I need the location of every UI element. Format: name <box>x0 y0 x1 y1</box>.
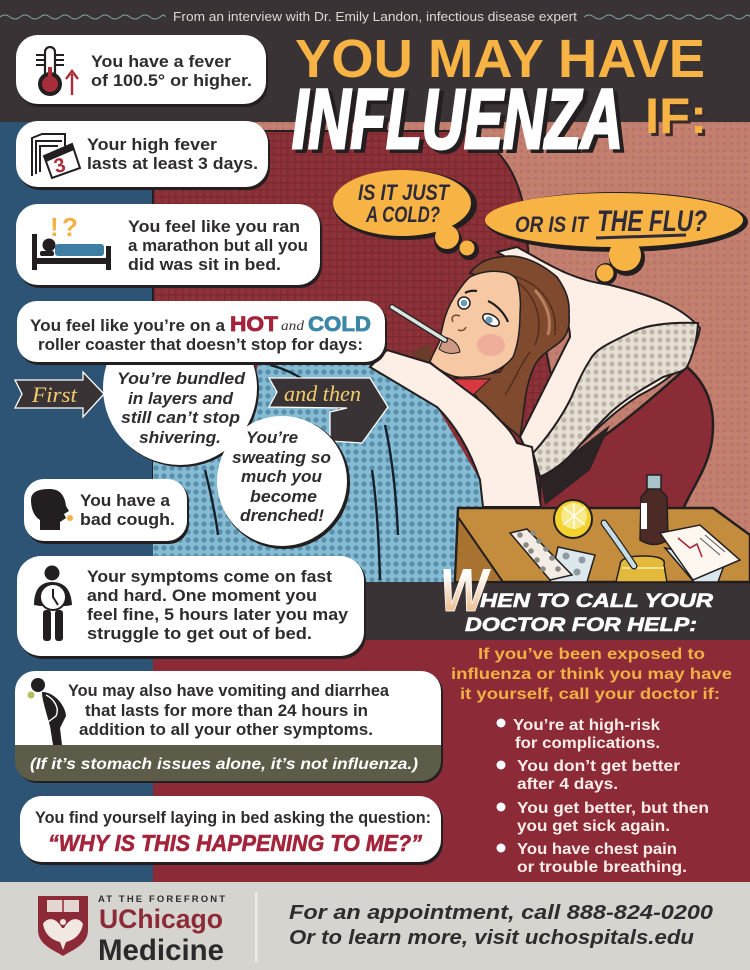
panel: ran a marathon: did was sit in bed. <box>128 256 281 274</box>
title <box>292 29 710 169</box>
list: reasons to call: for complications. <box>515 735 660 752</box>
wavy line right <box>584 15 750 19</box>
panel: vomiting and diarrhea: You may also have vomiting and diarrhea <box>68 682 390 700</box>
footer: AT THE FOREFRONT <box>98 894 225 905</box>
icon: coughing head <box>31 489 73 530</box>
list: reasons to call: You don’t get better <box>517 758 680 775</box>
title: IF: <box>648 91 710 147</box>
icon: honey jar and spoon <box>604 523 667 582</box>
thought bubble: or is it the flu: OR IS IT <box>515 212 589 237</box>
panel: fever lasts 3 days <box>16 121 270 190</box>
thought bubble: is it just a cold <box>333 170 479 260</box>
arrow: first <box>15 372 104 417</box>
icon: person vomiting <box>28 678 66 745</box>
icon: bed with exclamation and question: ? <box>62 212 78 242</box>
panel: ran a marathon <box>16 204 322 288</box>
armchair right wing <box>540 367 713 512</box>
callout: sweating: sweating so <box>232 448 331 467</box>
panel: vomiting and diarrhea: (If it’s stomach issues alone, it’s not influenza.) <box>30 756 418 773</box>
list: reasons to call <box>496 717 709 876</box>
panel: vomiting and diarrhea: addition to all your other symptoms. <box>79 721 373 739</box>
heading: when to call your doctor: DOCTOR FOR HELP: <box>465 615 697 636</box>
thought bubble: or is it the flu <box>485 192 748 285</box>
callout: bundled in layers <box>103 311 259 467</box>
callout: sweating: drenched! <box>240 506 324 525</box>
footer <box>0 882 750 970</box>
icon: book <box>660 525 740 582</box>
panel: symptoms come on fast: Your symptoms come on fast <box>87 568 333 586</box>
panel: bad cough <box>24 479 189 544</box>
panel: ran a marathon: a marathon but all you <box>128 237 308 255</box>
text block: call your doctor if: If you’ve been exposed to <box>478 646 705 663</box>
icon: pill blister packs <box>510 529 595 582</box>
thought bubble: is it just a cold: IS IT JUST <box>358 180 450 205</box>
panel: bad cough: bad cough. <box>80 511 175 529</box>
panel: symptoms come on fast <box>17 556 366 659</box>
red shirt <box>452 379 490 398</box>
title: YOU MAY HAVE <box>295 29 705 89</box>
panel: symptoms come on fast: and hard. One moment you <box>87 587 317 605</box>
armchair back <box>153 131 560 520</box>
illustration: bedside table with medicines <box>455 475 750 582</box>
text block: call your doctor if <box>451 646 732 703</box>
title: IF: <box>645 88 707 144</box>
panel: vomiting and diarrhea <box>15 671 443 783</box>
callout: bundled in layers: in layers and <box>128 389 234 408</box>
panel: hot and cold roller coaster: COLD <box>308 313 371 336</box>
panel: hot and cold roller coaster <box>17 301 387 365</box>
arrow: and then <box>269 378 388 443</box>
icon: syrup bottle <box>640 475 668 544</box>
panel: fever lasts 3 days: lasts at least 3 days. <box>87 155 258 173</box>
list: reasons to call: You get better, but then <box>517 800 709 817</box>
callout: sweating <box>217 416 350 549</box>
top credit line: From an interview with Dr. Emily Landon, infectious disease expert <box>173 10 578 24</box>
panel: fever 100.5 <box>16 35 268 107</box>
thought bubble: or is it the flu: THE FLU? <box>597 205 707 238</box>
white gown sleeve <box>370 350 541 507</box>
arrow: first: First <box>31 382 78 407</box>
footer: Medicine <box>98 934 224 967</box>
panel: bad cough: You have a <box>80 492 171 510</box>
list: reasons to call: you get sick again. <box>517 818 670 835</box>
icon: university crest <box>38 896 88 956</box>
panel: why is this happening to me <box>20 796 443 865</box>
panel: fever 100.5: You have a fever <box>91 53 232 71</box>
panel: hot and cold roller coaster: roller coaster that doesn’t stop for days: <box>38 336 363 354</box>
panel: why is this happening to me: You find yourself laying in bed asking the question: <box>35 809 431 827</box>
panel: why is this happening to me: “WHY IS THIS HAPPENING TO ME?” <box>48 830 422 856</box>
thought bubble: is it just a cold: A COLD? <box>365 202 440 227</box>
icon: bed with exclamation and question <box>32 212 111 270</box>
footer: Or to learn more, visit uchospitals.edu <box>289 926 695 949</box>
panel: hot and cold roller coaster: and <box>281 319 305 334</box>
arrow: and then: and then <box>284 381 361 406</box>
callout: bundled in layers: still can’t stop <box>121 408 240 427</box>
list: reasons to call: You have chest pain <box>517 841 677 858</box>
hair <box>410 256 569 437</box>
icon: bed with exclamation and question: ! <box>50 212 59 242</box>
panel: vomiting and diarrhea: that lasts for more than 24 hours in <box>85 702 368 720</box>
icon: calendar <box>32 134 80 178</box>
heading: when to call your doctor: HEN TO CALL YOUR <box>480 591 713 612</box>
shadow under pillow <box>540 425 610 505</box>
panel: hot and cold roller coaster: HOT <box>230 313 278 336</box>
callout: bundled in layers: shivering. <box>139 428 221 447</box>
list: reasons to call: or trouble breathing. <box>517 859 687 876</box>
callout: sweating: much you <box>241 467 323 486</box>
callout: sweating: become <box>250 487 317 506</box>
icon: calendar: 3 <box>52 154 68 178</box>
list: reasons to call: You’re at high-risk <box>513 717 660 734</box>
callout: sweating: You’re <box>246 428 298 447</box>
blue blanket <box>153 365 484 582</box>
panel: hot and cold roller coaster: You feel like you’re on a <box>30 317 226 335</box>
icon: person with clock <box>34 566 72 641</box>
panel: fever 100.5: of 100.5° or higher. <box>91 72 252 90</box>
face <box>430 271 520 377</box>
panel: ran a marathon: You feel like you ran <box>128 218 300 236</box>
heading: when to call your doctor: W <box>440 557 491 624</box>
thermometer in mouth <box>392 307 445 340</box>
panel: symptoms come on fast: feel fine, 5 hours later you may <box>87 606 349 624</box>
icon: thermometer with up arrow <box>36 47 78 96</box>
icon: lemon <box>554 500 592 538</box>
top credit line <box>0 10 750 24</box>
footer: For an appointment, call 888-824-0200 <box>289 901 714 924</box>
illustration: woman sick in armchair <box>153 131 713 582</box>
panel: fever lasts 3 days: Your high fever <box>87 136 218 154</box>
text block: call your doctor if: influenza or think you may have <box>451 666 732 683</box>
footer: UChicago <box>99 904 223 934</box>
callout: bundled in layers: You’re bundled <box>117 369 246 388</box>
list: reasons to call: after 4 days. <box>517 776 618 793</box>
panel: symptoms come on fast: struggle to get out of bed. <box>87 625 312 643</box>
heading: when to call your doctor <box>440 557 713 636</box>
pillow <box>497 247 700 478</box>
text block: call your doctor if: it yourself, call your doctor if: <box>460 686 720 703</box>
wavy line left <box>0 15 165 19</box>
